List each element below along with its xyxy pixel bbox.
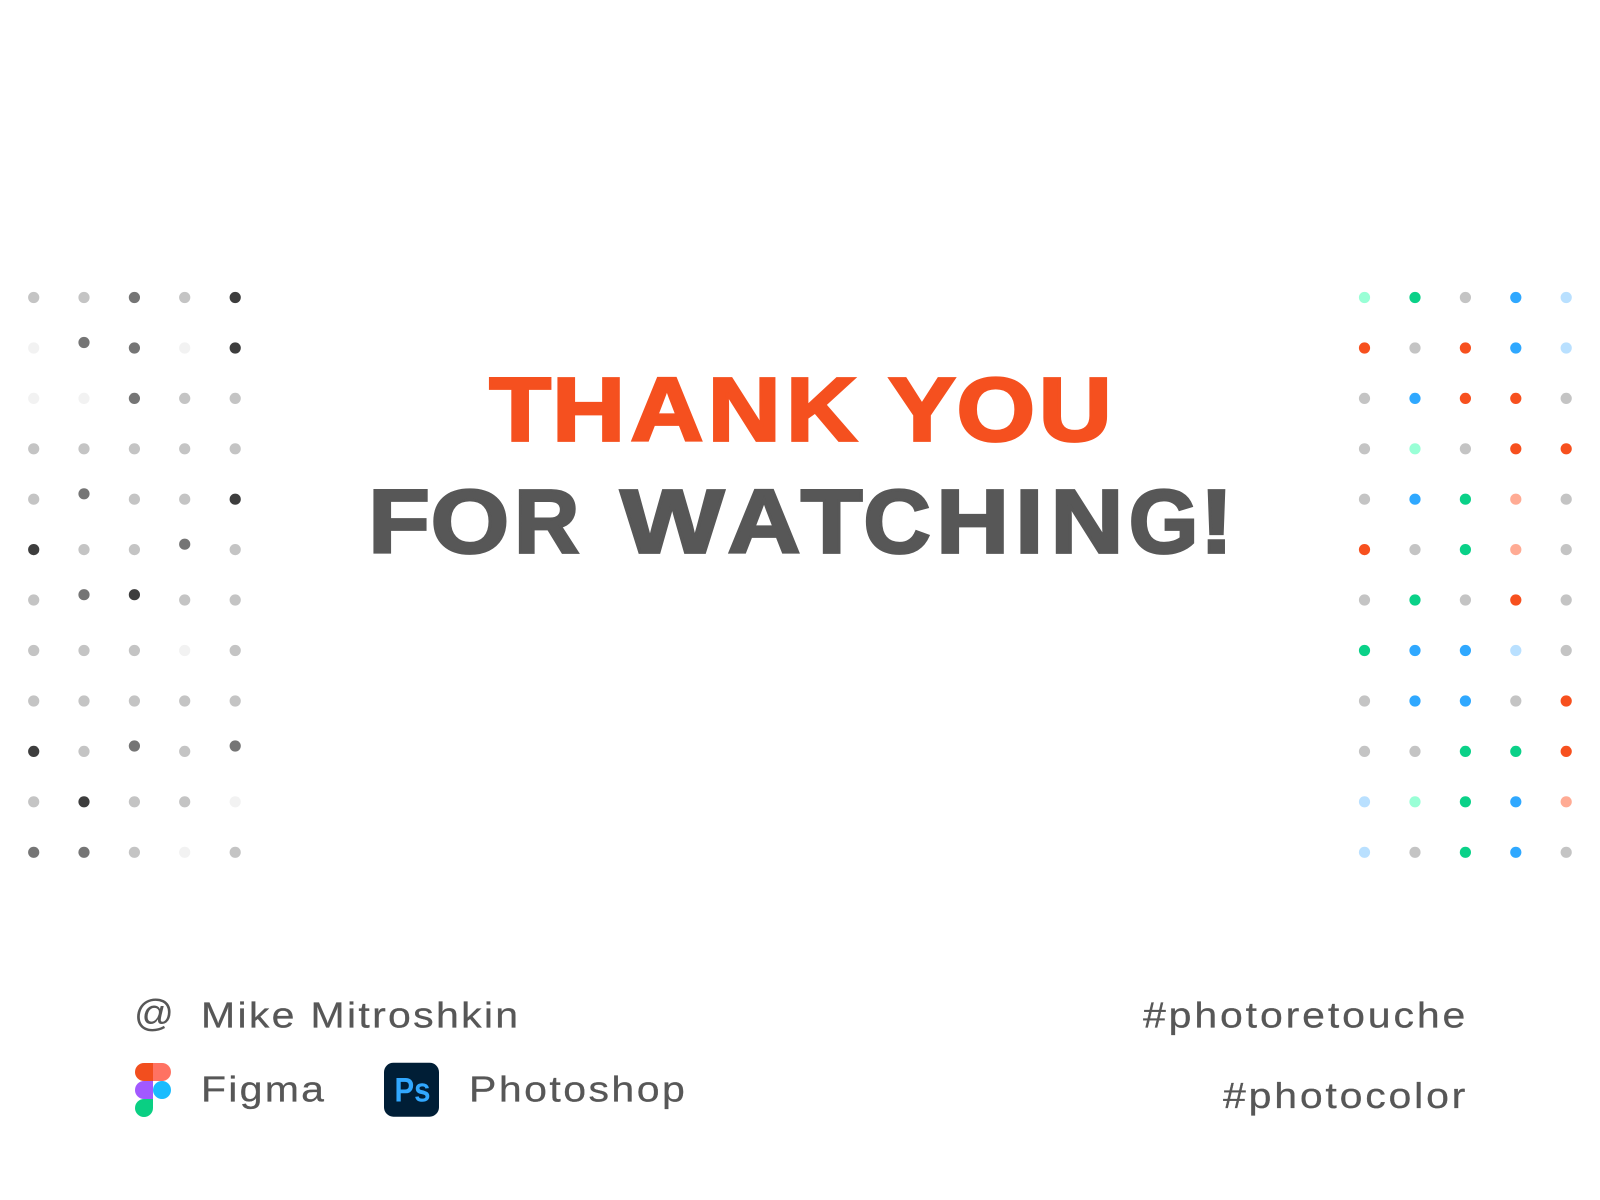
icon: at sign: @ (134, 993, 174, 1035)
icon: figma logo (135, 1063, 171, 1117)
title: thank you: K (786, 360, 857, 460)
title: for watching: HIN (936, 472, 1123, 572)
hashtag: photoretouche: #photoretouche (1143, 996, 1465, 1036)
title: for watching: AT (728, 472, 862, 572)
title: for watching (368, 472, 1233, 572)
title: for watching: W (620, 472, 725, 572)
title: thank you: YOU (888, 360, 1112, 460)
hashtag: photocolor: #photocolor (1223, 1076, 1466, 1116)
title: thank you: THAN (489, 360, 781, 460)
title: for watching: R (514, 472, 579, 572)
title: for watching: FO (368, 472, 509, 572)
title: for watching: C (864, 472, 931, 572)
title: thank you (489, 360, 1112, 460)
figma label: Figma (201, 1070, 325, 1110)
dot grid: right colored (1359, 292, 1572, 858)
author name: Mike Mitroshkin (201, 996, 518, 1036)
dot grid: left monochrome (28, 292, 241, 858)
icon: photoshop logo (384, 1063, 439, 1117)
photoshop label: Photoshop (469, 1070, 685, 1110)
title: for watching: ! (1200, 472, 1233, 572)
icon: photoshop logo: Ps (394, 1071, 430, 1109)
title: for watching: G (1129, 472, 1198, 572)
